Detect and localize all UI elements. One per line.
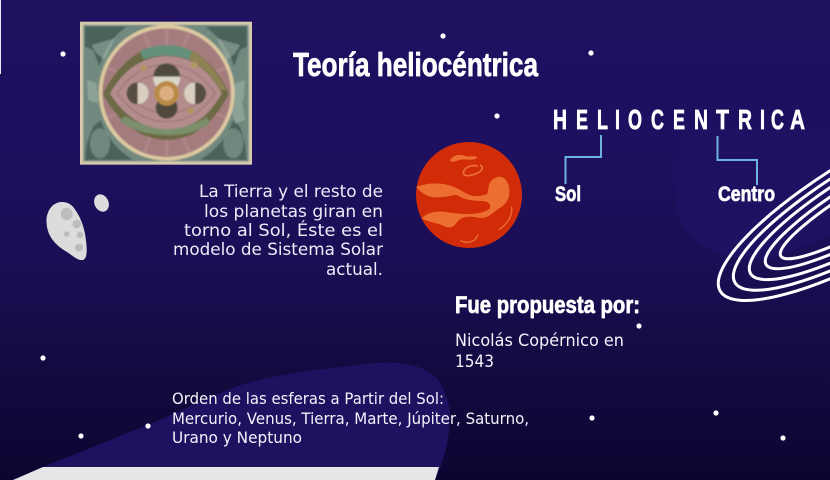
background blob: bottom (13, 363, 450, 480)
icon: planet rings (695, 60, 830, 334)
word: HELIOCENTRICA: I (760, 104, 765, 135)
word: HELIOCENTRICA (553, 104, 805, 135)
word: HELIOCENTRICA: N (694, 104, 708, 135)
word: HELIOCENTRICA: T (716, 104, 729, 135)
connector: Sol (566, 135, 601, 184)
top-left edge line (0, 0, 1, 74)
icon: meteorite (46, 192, 112, 260)
word: HELIOCENTRICA: C (771, 104, 784, 135)
word: HELIOCENTRICA: E (576, 104, 588, 135)
text block: description: torno al Sol, Éste es el (184, 221, 383, 240)
text block: description: los planetas giran en (204, 202, 383, 221)
title: Teoría heliocéntrica (293, 46, 539, 83)
text block: order of spheres: Mercurio, Venus, Tierra, Marte, Júpiter, Saturno, (172, 409, 529, 428)
text block: author: Nicolás Copérnico en (455, 331, 624, 350)
word: HELIOCENTRICA: A (790, 104, 805, 135)
word: HELIOCENTRICA: I (615, 104, 620, 135)
white band at the bottom (13, 467, 439, 480)
heading: Fue propuesta por: Fue propuesta por: (455, 292, 640, 319)
text block: author (455, 331, 624, 371)
text block: description: modelo de Sistema Solar (173, 240, 383, 259)
word: HELIOCENTRICA: H (553, 104, 567, 135)
word: HELIOCENTRICA: E (673, 104, 685, 135)
text block: order of spheres: Orden de las esferas a Partir del Sol: (172, 389, 444, 408)
text block: description (173, 182, 383, 279)
text block: order of spheres: Urano y Neptuno (172, 428, 302, 447)
text block: description: actual. (326, 260, 383, 279)
text block: order of spheres (172, 389, 529, 447)
word: HELIOCENTRICA: C (651, 104, 664, 135)
background blob: top right (675, 130, 830, 259)
text block: author: 1543 (455, 352, 494, 371)
word: HELIOCENTRICA: R (738, 104, 752, 135)
label: Sol: Sol (555, 183, 581, 206)
word: HELIOCENTRICA: O (628, 104, 642, 135)
icon: red planet (416, 142, 522, 248)
text block: description: La Tierra y el resto de (199, 182, 383, 201)
picture: heliocentric chart (80, 22, 252, 165)
label: Centro: Centro (718, 183, 775, 206)
connector: Centro (718, 136, 757, 185)
word: HELIOCENTRICA: L (597, 104, 608, 135)
stars (40, 33, 786, 441)
